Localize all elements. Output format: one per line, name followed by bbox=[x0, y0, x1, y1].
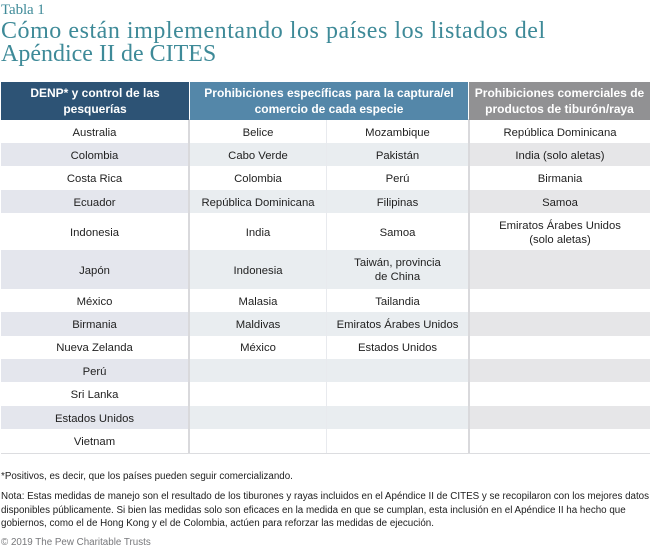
column 3 countries: Estados Unidos bbox=[358, 342, 437, 354]
row stripe: Japón bbox=[1, 250, 650, 289]
header: prohibiciones específicas: comercio de cada especie bbox=[255, 102, 403, 116]
column 1 countries: Indonesia bbox=[70, 227, 119, 239]
column 3 countries: Samoa bbox=[380, 227, 415, 239]
column 2 countries: Cabo Verde bbox=[228, 150, 288, 162]
column 1 countries: Estados Unidos bbox=[55, 413, 134, 425]
column divider 2 bbox=[326, 119, 327, 453]
column 3 countries: Filipinas bbox=[377, 197, 418, 209]
column 1 countries: Birmania bbox=[72, 319, 117, 331]
row stripe: Estados Unidos bbox=[1, 406, 650, 429]
column 4 countries: República Dominicana bbox=[503, 127, 617, 139]
note bbox=[1, 491, 649, 529]
header: DENP bbox=[1, 82, 189, 120]
column 1 countries bbox=[55, 127, 134, 448]
column 2 countries: Maldivas bbox=[236, 319, 280, 331]
title bbox=[1, 18, 546, 67]
header: prohibiciones comerciales: Prohibiciones comerciales de bbox=[475, 86, 644, 100]
note: Nota: Estas medidas de manejo son el resultado de los tiburones y rayas incluidos en el Apéndice II de CITES y se recopilaron con los mejores datos bbox=[1, 491, 649, 502]
table label: Tabla 1 bbox=[1, 2, 45, 18]
column 1 countries: Perú bbox=[83, 366, 106, 378]
column 3 countries: Perú bbox=[386, 173, 409, 185]
row stripe: Birmania bbox=[1, 312, 650, 336]
copyright: © 2019 The Pew Charitable Trusts bbox=[1, 537, 151, 548]
table bottom rule bbox=[1, 453, 650, 454]
column 1 countries: Nueva Zelanda bbox=[56, 342, 133, 354]
column 4 countries bbox=[499, 127, 621, 246]
header: prohibiciones específicas bbox=[190, 82, 468, 120]
column 3 countries: Mozambique bbox=[365, 127, 430, 139]
column 3 countries: Taiwán, provincia bbox=[354, 257, 441, 269]
title: Cómo están implementando los países los listados del bbox=[1, 18, 546, 44]
column 2 countries: Colombia bbox=[234, 173, 282, 185]
column 4 countries: Emiratos Árabes Unidos bbox=[499, 220, 621, 232]
column 2 countries bbox=[201, 127, 315, 354]
note: gobiernos, como el de Hong Kong y el de Colombia, actúen para reforzar las medidas de ejecución. bbox=[1, 518, 434, 529]
header: prohibiciones comerciales bbox=[469, 82, 650, 120]
column 4 countries: India (solo aletas) bbox=[515, 150, 605, 162]
column 4 countries: (solo aletas) bbox=[529, 234, 591, 246]
column 3 countries: Pakistán bbox=[376, 150, 419, 162]
column 1 countries: Ecuador bbox=[73, 197, 116, 209]
column 3 countries bbox=[337, 127, 458, 354]
header: prohibiciones específicas: Prohibiciones específicas para la captura/el bbox=[204, 86, 454, 100]
column 1 countries: Japón bbox=[79, 265, 110, 277]
column 2 countries: India bbox=[246, 227, 270, 239]
header: prohibiciones comerciales: productos de tiburón/raya bbox=[485, 102, 634, 116]
column 2 countries: República Dominicana bbox=[201, 197, 315, 209]
column 3 countries: Tailandia bbox=[375, 296, 420, 308]
row stripe: Perú bbox=[1, 359, 650, 382]
column 2 countries: Malasia bbox=[239, 296, 277, 308]
column 3 countries: de China bbox=[375, 271, 420, 283]
column divider 3 bbox=[468, 119, 470, 453]
column 1 countries: Colombia bbox=[71, 150, 118, 162]
column divider 1 bbox=[188, 119, 190, 453]
title: Apéndice II de CITES bbox=[1, 41, 216, 67]
column 2 countries: Belice bbox=[243, 127, 273, 139]
column 1 countries: Costa Rica bbox=[67, 173, 122, 185]
column 1 countries: México bbox=[77, 296, 112, 308]
row stripe: Ecuador bbox=[1, 190, 650, 213]
column 2 countries: México bbox=[240, 342, 276, 354]
column 1 countries: Australia bbox=[73, 127, 116, 139]
column 2 countries: Indonesia bbox=[234, 265, 282, 277]
header: DENP: pesquerías bbox=[63, 102, 127, 116]
row stripe: Colombia bbox=[1, 143, 650, 166]
footnote: *Positivos, es decir, que los países pueden seguir comercializando. bbox=[1, 471, 293, 482]
column 3 countries: Emiratos Árabes Unidos bbox=[337, 319, 458, 331]
header: DENP: DENP* y control de las bbox=[30, 86, 160, 100]
column 1 countries: Sri Lanka bbox=[71, 389, 118, 401]
column 4 countries: Samoa bbox=[542, 197, 578, 209]
column 1 countries: Vietnam bbox=[74, 436, 115, 448]
column 4 countries: Birmania bbox=[538, 173, 582, 185]
note: disponibles públicamente. Si bien las medidas solo son eficaces en la medida en que se cumplan, esta inclusión en el Apéndice II ha hecho que bbox=[1, 504, 626, 516]
